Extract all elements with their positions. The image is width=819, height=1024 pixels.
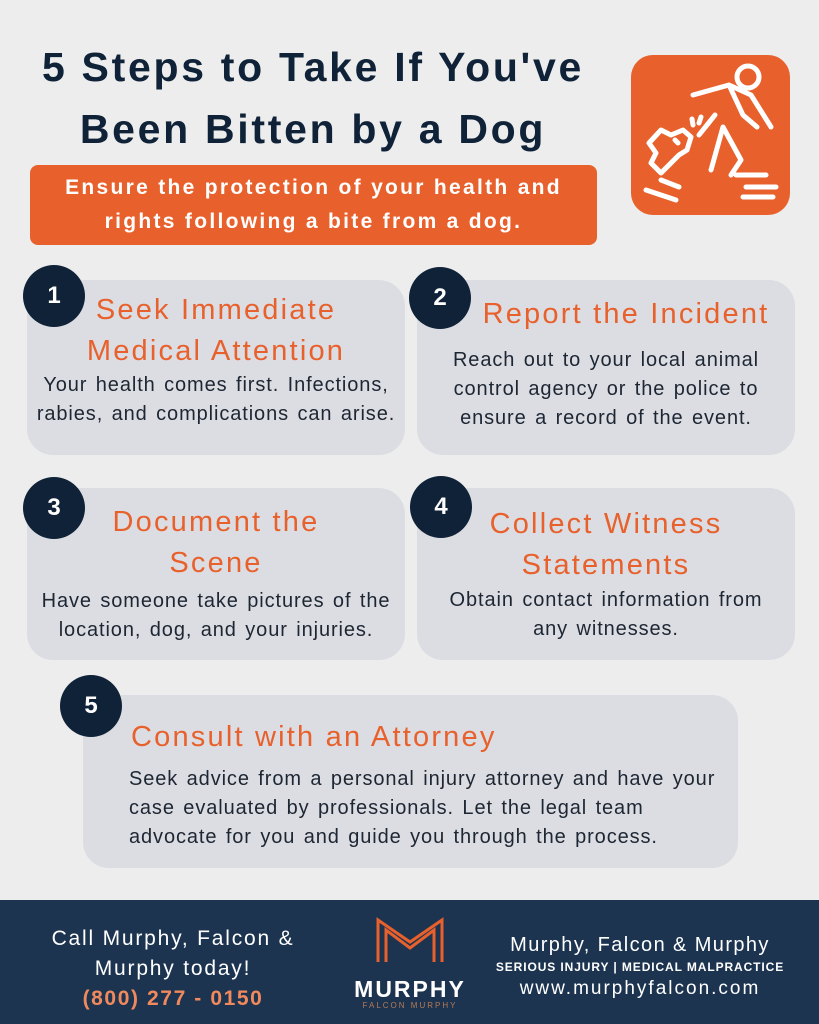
heading 4: Statements [522,549,690,581]
heading 2: Report the Incident [483,298,769,330]
footer call text: Call Murphy, Falcon & [52,927,294,950]
number 4 [410,476,472,538]
footer firm info [496,934,784,999]
number 3: 3 [47,494,61,521]
icon: dog bite [631,55,790,215]
number 2 [409,267,471,329]
title: 5 Steps to Take If You've [42,44,584,90]
text 4: any witnesses. [533,618,679,640]
heading 1: Seek Immediate [96,294,336,326]
text 2: Reach out to your local animal [453,349,759,371]
heading 4: Collect Witness [490,508,722,540]
text 1 [37,374,395,425]
text 2 [453,349,759,429]
text 5: Seek advice from a personal injury attorney and have your [129,768,715,790]
title: Been Bitten by a Dog [80,106,546,152]
text 4 [450,589,762,640]
footer firm info: Murphy, Falcon & Murphy [510,934,770,956]
text 5 [129,768,715,848]
card 2 [417,280,795,455]
footer firm info: www.murphyfalcon.com [520,978,760,999]
text 5: case evaluated by professionals. Let the legal team [129,797,644,819]
number 1: 1 [47,282,61,309]
logo [354,917,466,1010]
text 3: Have someone take pictures of the [42,590,390,612]
text 3 [42,590,390,641]
number 5: 5 [84,692,98,719]
text 5: advocate for you and guide you through the process. [129,826,658,848]
heading 4 [490,508,722,581]
text 4: Obtain contact information from [450,589,762,611]
title [42,44,584,152]
text 2: ensure a record of the event. [460,407,752,429]
number 4: 4 [434,493,448,520]
heading 3 [113,506,319,579]
subtitle banner: Ensure the protection of your health and [65,176,562,199]
footer call text [52,927,294,1010]
number 2: 2 [433,284,447,311]
card 5 [83,695,738,868]
heading 1: Medical Attention [87,335,345,367]
logo: MURPHY [354,976,466,1002]
text 2: control agency or the police to [454,378,758,400]
heading 5: Consult with an Attorney [131,721,497,753]
footer call text: Murphy today! [95,957,251,980]
subtitle banner: rights following a bite from a dog. [105,210,522,233]
heading 3: Scene [169,547,263,579]
footer [0,900,819,1024]
number 1 [23,265,85,327]
text 1: Your health comes first. Infections, [43,374,389,396]
number 3 [23,477,85,539]
number 5 [60,675,122,737]
footer firm info: SERIOUS INJURY | MEDICAL MALPRACTICE [496,960,784,974]
text 1: rabies, and complications can arise. [37,403,395,425]
card 1 [27,280,405,455]
footer call text: (800) 277 - 0150 [83,987,263,1010]
card 3 [27,488,405,660]
heading 3: Document the [113,506,319,538]
logo: FALCON MURPHY [363,1001,457,1010]
text 3: location, dog, and your injuries. [59,619,373,641]
card 4 [417,488,795,660]
subtitle banner [30,165,597,245]
heading 1 [87,294,345,367]
